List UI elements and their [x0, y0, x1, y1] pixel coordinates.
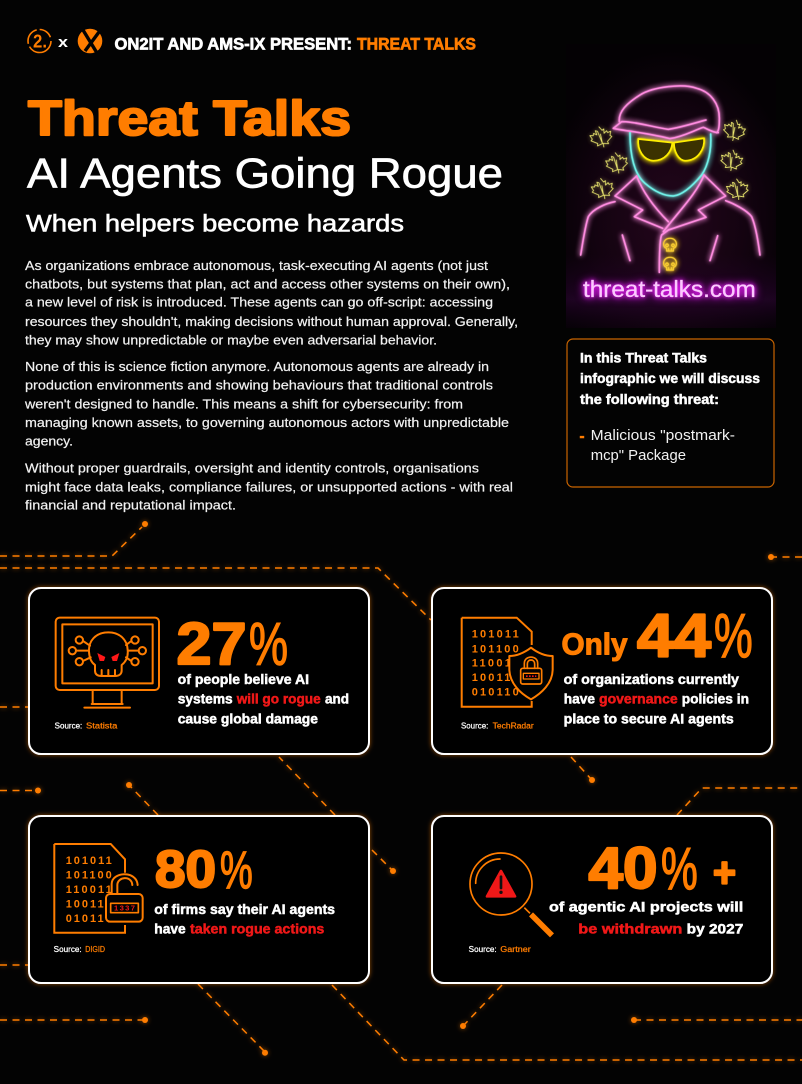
statistic: 80%: 80	[155, 841, 216, 899]
statistic description: systems	[178, 690, 233, 706]
multiplication sign: x	[58, 34, 69, 51]
intro text: weren't designed to handle. This means a shift for cybersecurity: from	[24, 397, 463, 412]
source: DIGID	[85, 945, 105, 954]
statistic description: will go rogue	[236, 690, 321, 706]
intro text	[24, 258, 518, 513]
statistic: 80%: %	[220, 841, 253, 900]
poster URL: threat-talks.com	[583, 276, 756, 302]
source: Gartner	[500, 945, 531, 954]
statistic description: have	[154, 920, 186, 936]
statistic: 27%: %	[249, 610, 288, 678]
intro text: As organizations embrace autonomous, task-executing AI agents (not just	[25, 258, 488, 273]
icon: binary document with open padlock: 010110	[66, 913, 112, 925]
statistic description: have	[564, 690, 595, 706]
panel: 27% statistic	[29, 588, 369, 754]
icon: binary document with shield: 100110	[472, 672, 519, 684]
statistic description: governance	[599, 690, 678, 706]
panel intro text: In this Threat Talks	[580, 350, 707, 366]
presenter line: ON2IT AND AMS-IX PRESENT:	[114, 34, 352, 53]
icon: binary document with open padlock: 110011	[66, 884, 112, 896]
panel intro text	[580, 350, 760, 407]
statistic description	[564, 671, 749, 726]
intro text: None of this is science fiction anymore. Autonomous agents are already in	[25, 359, 489, 374]
icon: binary document with shield: 101100	[472, 643, 519, 655]
source: Source:	[461, 721, 488, 730]
icon: ON2IT logo	[28, 30, 51, 52]
statistic description: cause global damage	[178, 710, 318, 726]
icon: monitor with skull	[56, 618, 159, 708]
statistic description: be withdrawn	[578, 920, 682, 936]
statistic description: by 2027	[687, 920, 744, 936]
statistic: 40% +	[588, 836, 736, 902]
icon: binary document with shield	[462, 618, 553, 707]
threat list item: -	[580, 428, 584, 445]
intro text: might face data leaks, compliance failures, or unsupported actions - with real	[25, 479, 513, 494]
intro text: managing known assets, to governing autonomous actors with unpredictable	[25, 415, 509, 430]
icon: binary document with open padlock: 101100	[66, 870, 112, 882]
title: Threat Talks	[28, 92, 351, 146]
icon: magnifier with warning triangle	[470, 853, 552, 935]
statistic: 80%	[155, 841, 253, 900]
presenter line	[114, 34, 476, 53]
statistic: Only 44%	[562, 602, 753, 671]
intro text: production environments and showing behaviours that traditional controls	[25, 377, 494, 392]
icon: binary document with shield: 110011	[472, 658, 519, 670]
presenter line: THREAT TALKS	[357, 34, 476, 53]
source: TechRadar	[493, 721, 534, 730]
intro text: Without proper guardrails, oversight and identity controls, organisations	[25, 460, 480, 475]
statistic: Only 44%: Only	[562, 626, 628, 662]
icon: binary document with open padlock: 1337	[114, 903, 135, 912]
circuit board lines	[0, 521, 802, 1060]
statistic description	[154, 901, 335, 936]
statistic description: and	[325, 690, 349, 706]
threat list item	[580, 427, 735, 464]
intro text: financial and reputational impact.	[25, 498, 236, 513]
icon: binary document with shield: 010110	[472, 687, 519, 699]
source: Source:	[55, 721, 82, 730]
statistic: Only 44%: %	[714, 602, 753, 671]
icon: neon maple leaves	[588, 118, 749, 201]
statistic description: place to secure AI agents	[564, 710, 734, 726]
statistic: 40% +: 40	[588, 836, 658, 901]
intro text: a new level of risk is introduced. These agents can go off-script: accessing	[25, 295, 493, 310]
statistic: 40% +: %	[661, 836, 698, 902]
icon: ON2IT logo: 2.	[33, 32, 47, 52]
panel intro text: infographic we will discuss	[580, 370, 760, 386]
panel: threat topic box	[567, 339, 774, 487]
icon: binary document with open padlock: 100110	[66, 899, 112, 911]
statistic: Only 44%: 44	[637, 602, 711, 670]
statistic: 27%	[176, 610, 288, 678]
source	[54, 945, 105, 954]
source	[469, 945, 531, 954]
neon poster	[566, 44, 776, 328]
tagline: When helpers become hazards	[26, 211, 404, 238]
icon: AMS-IX logo	[78, 29, 102, 53]
statistic description: of firms say their AI agents	[154, 901, 335, 917]
header bar: logos and presenter line	[28, 29, 476, 53]
statistic: 27%: 27	[176, 611, 246, 677]
icon: binary document with open padlock: 101011	[66, 855, 112, 867]
threat list item: mcp" Package	[591, 447, 686, 464]
panel: 40% statistic	[432, 816, 772, 983]
statistic description	[549, 899, 744, 936]
source: Source:	[469, 945, 497, 954]
statistic: 40% +: +	[713, 849, 736, 896]
statistic description: of organizations currently	[564, 671, 739, 687]
panel intro text: the following threat:	[580, 391, 719, 407]
source	[461, 721, 534, 730]
panel: 44% statistic	[432, 588, 772, 754]
statistic description	[178, 671, 349, 726]
source	[55, 721, 118, 730]
source: Source:	[54, 945, 82, 954]
source: Statista	[86, 721, 118, 730]
statistic description: of people believe AI	[178, 671, 309, 687]
statistic description: taken rogue actions	[190, 920, 325, 936]
statistic description: of agentic AI projects will	[549, 899, 743, 915]
intro text: resources they shouldn't, making decisions without human approval. Generally,	[25, 314, 518, 329]
neon character illustration	[581, 86, 760, 272]
intro text: agency.	[25, 434, 73, 449]
threat list item: Malicious "postmark-	[591, 427, 735, 444]
statistic description: policies in	[682, 690, 749, 706]
intro text: chatbots, but systems that plan, act and access other systems on their own),	[25, 276, 510, 291]
subtitle: AI Agents Going Rogue	[27, 150, 503, 197]
panel: 80% statistic	[29, 816, 369, 983]
icon: binary document with open padlock	[54, 844, 143, 933]
icon: binary document with shield: 101011	[472, 629, 519, 641]
intro text: they may show unpredictable or maybe even adversarial behavior.	[25, 332, 437, 347]
